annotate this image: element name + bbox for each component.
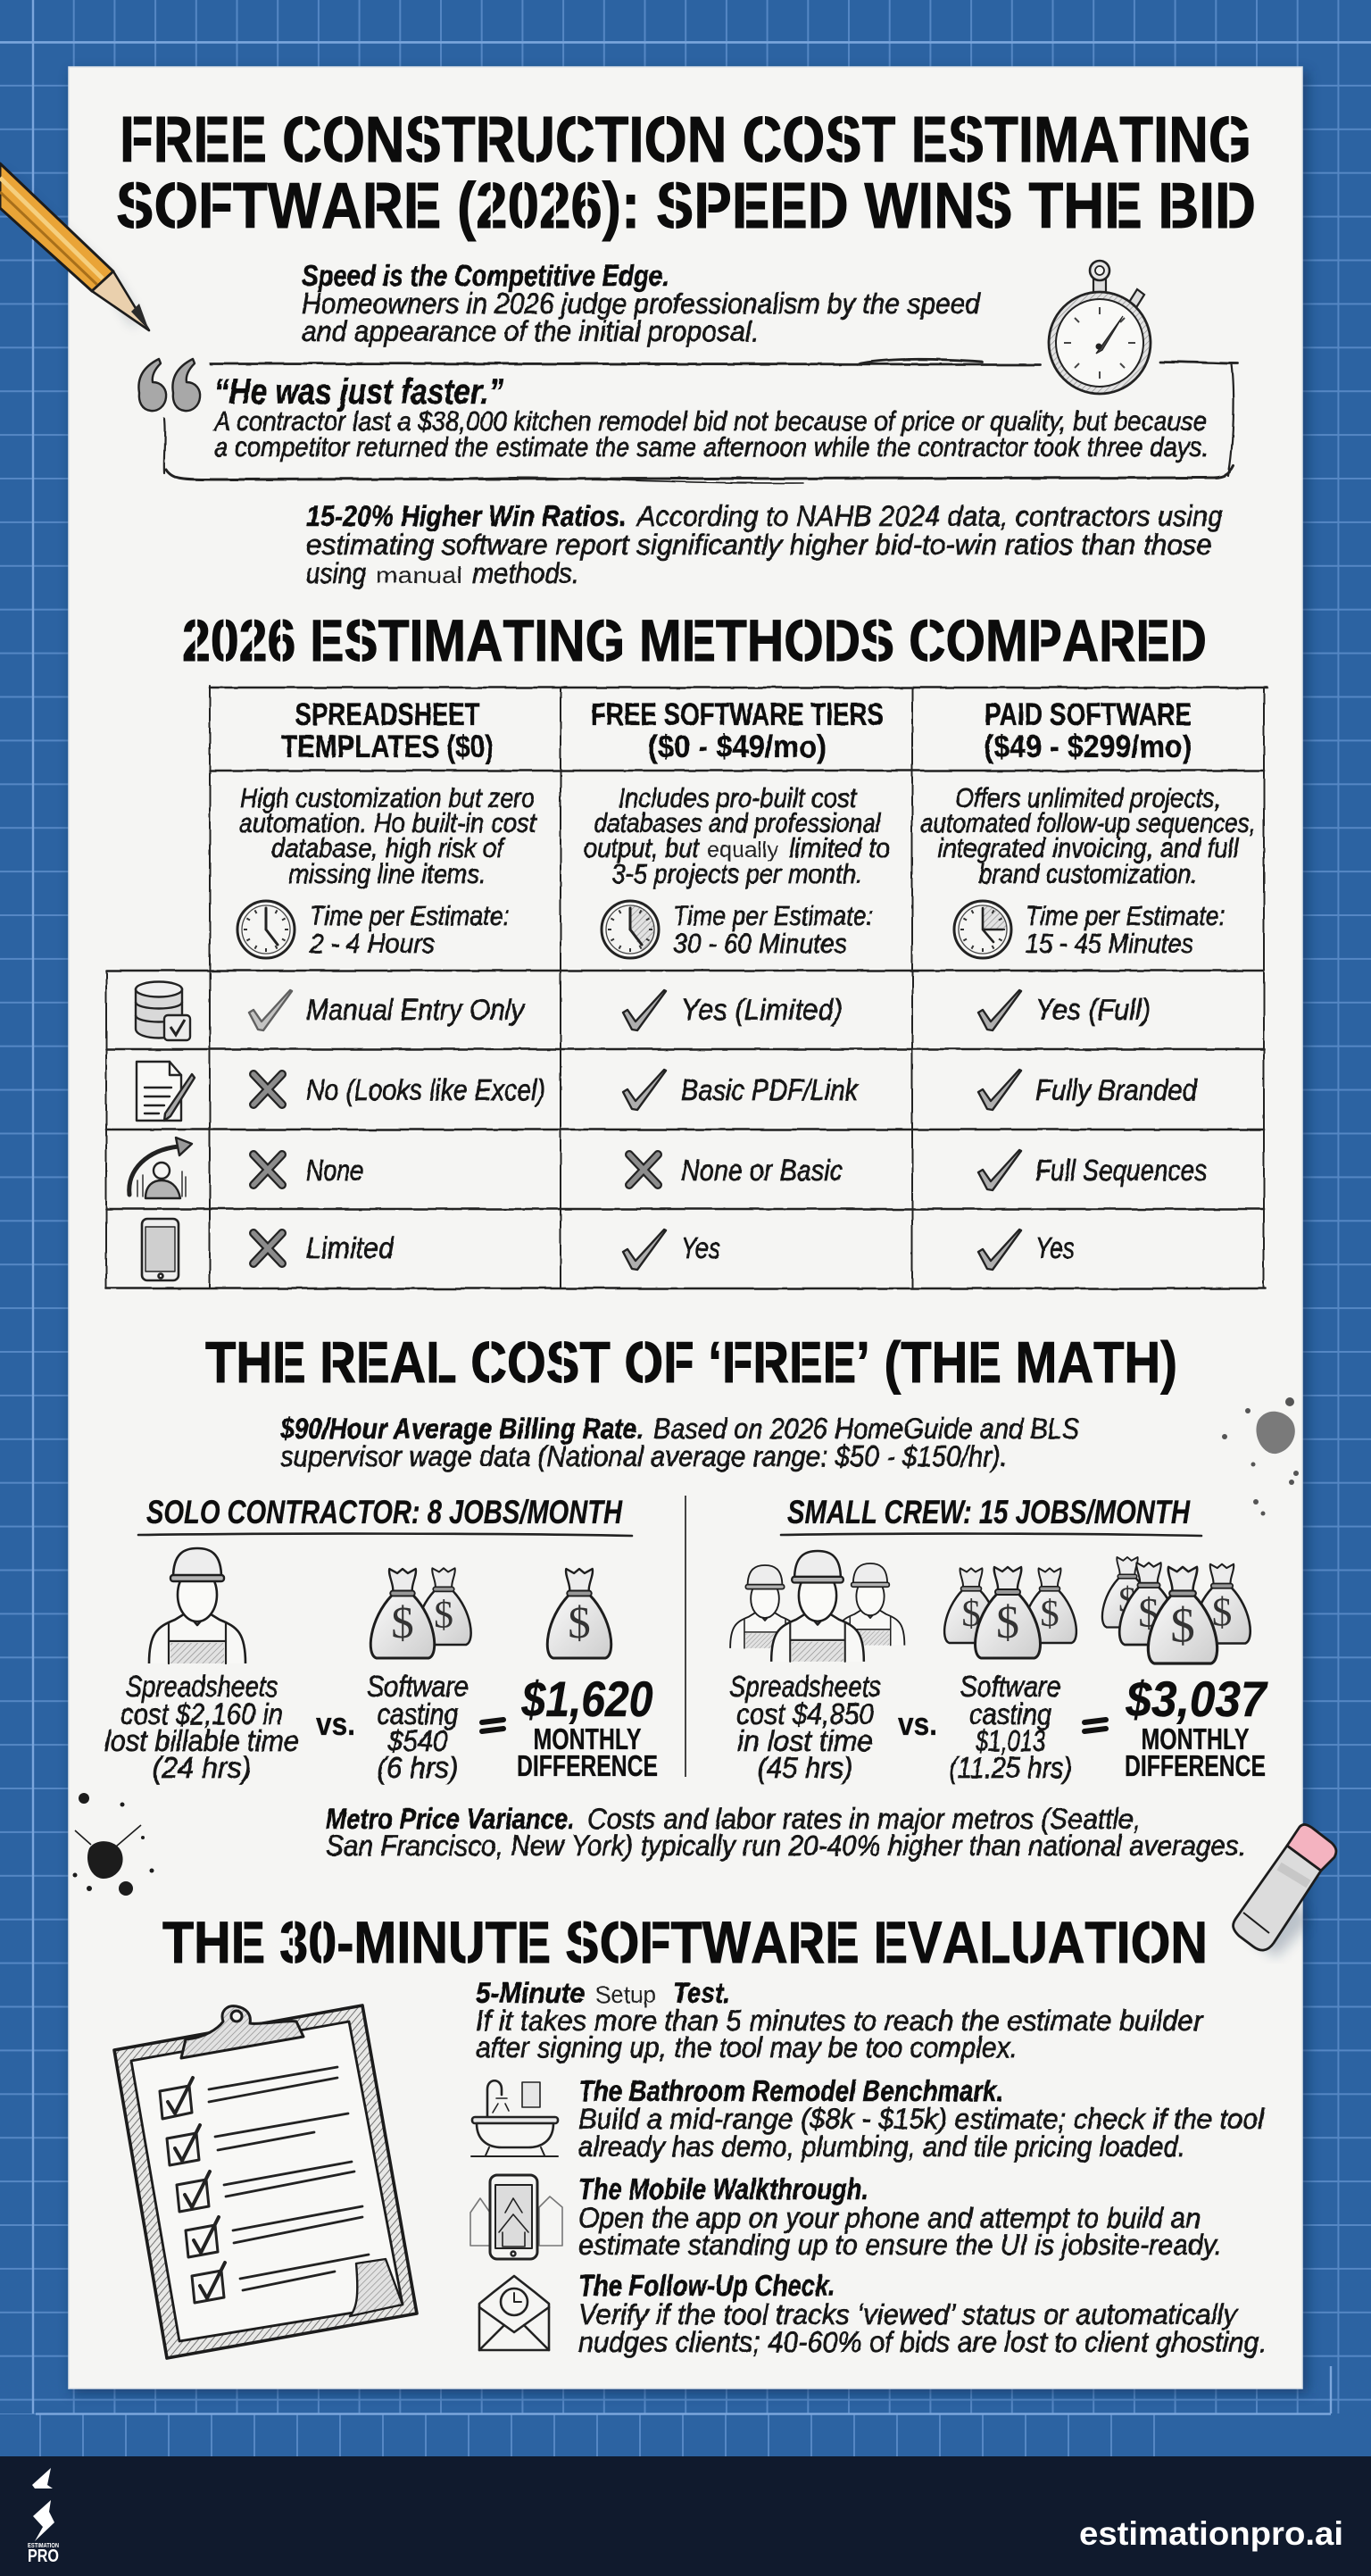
column descriptions: Includes pro-built cost bbox=[618, 782, 858, 813]
crew software cost: (11.25 hrs) bbox=[949, 1751, 1072, 1784]
crew spreadsheet cost bbox=[729, 1670, 881, 1784]
text: mobile walkthrough: The Mobile Walkthrough. bbox=[578, 2172, 868, 2205]
column descriptions: databases and professional bbox=[594, 807, 881, 838]
icon: phone bbox=[142, 1219, 179, 1280]
row labels: None bbox=[306, 1154, 363, 1187]
text: bathroom benchmark bbox=[578, 2074, 1265, 2163]
time per estimate labels: Time per Estimate: bbox=[673, 900, 873, 931]
column headers: ($49 - $299/mo) bbox=[984, 729, 1192, 764]
crew spreadsheet cost: in lost time bbox=[737, 1724, 873, 1757]
text: 5-minute setup test: after signing up, the tool may be too complex. bbox=[476, 2031, 1018, 2063]
crew monthly difference bbox=[1125, 1671, 1268, 1782]
text: bathroom benchmark: Build a mid-range ($8k - $15k) estimate; check if the tool bbox=[578, 2103, 1265, 2135]
text: 5-minute setup test: Test. bbox=[673, 1977, 730, 2009]
row labels: Manual Entry Only bbox=[306, 993, 526, 1026]
time per estimate labels: 15 - 45 Minutes bbox=[1026, 928, 1193, 959]
text: speed is the competitive edge: Speed is the Competitive Edge. bbox=[302, 259, 669, 292]
icon: bathtub bbox=[471, 2080, 558, 2156]
text: mobile walkthrough bbox=[578, 2172, 1222, 2261]
text: win ratios: using bbox=[306, 557, 366, 589]
crew monthly difference: $3,037 bbox=[1126, 1671, 1268, 1727]
heading: 30-minute evaluation: THE 30-MINUTE SOFTWARE EVALUATION bbox=[162, 1909, 1208, 1975]
text: follow-up check: The Follow-Up Check. bbox=[578, 2269, 835, 2302]
icon: crew of three bbox=[730, 1551, 904, 1662]
time per estimate labels: 2 - 4 Hours bbox=[309, 928, 435, 959]
solo monthly difference: MONTHLY bbox=[534, 1722, 641, 1755]
text: win ratios: methods. bbox=[472, 557, 579, 589]
crew spreadsheet cost: (45 hrs) bbox=[757, 1751, 853, 1784]
text: win ratios: 15-20% Higher Win Ratios. bbox=[306, 500, 627, 532]
text: metro price variance bbox=[326, 1803, 1246, 1862]
clipboard paper bbox=[131, 2022, 403, 2341]
solo spreadsheet cost: cost $2,160 in bbox=[120, 1697, 283, 1730]
text: win ratios: manual bbox=[376, 562, 462, 588]
solo software cost: casting bbox=[377, 1697, 459, 1730]
icon: clipboard checklist bbox=[114, 2005, 417, 2358]
crew monthly difference: DIFFERENCE bbox=[1125, 1749, 1266, 1782]
icon: clock 2-4 hours bbox=[237, 901, 295, 958]
solo monthly difference bbox=[517, 1671, 658, 1782]
title: SOFTWARE (2026): SPEED WINS THE BID bbox=[116, 171, 1256, 242]
column descriptions: missing line items. bbox=[289, 858, 486, 889]
text: metro price variance: Costs and labor rates in major metros (Seattle, bbox=[587, 1803, 1141, 1835]
row labels: No (Looks like Excel) bbox=[306, 1073, 545, 1106]
row labels: Yes (Limited) bbox=[681, 993, 843, 1026]
solo spreadsheet cost bbox=[104, 1670, 299, 1784]
heading: the real cost of free: THE REAL COST OF ‘FREE’ (THE MATH) bbox=[205, 1330, 1177, 1395]
pencil bbox=[0, 163, 149, 330]
column headers: TEMPLATES ($0) bbox=[281, 729, 494, 764]
solo monthly difference: DIFFERENCE bbox=[517, 1749, 658, 1782]
time per estimate labels: Time per Estimate: bbox=[310, 900, 510, 931]
icon: four money bags bbox=[1102, 1557, 1251, 1663]
row labels: None or Basic bbox=[681, 1154, 843, 1187]
row labels: Yes (Full) bbox=[1035, 993, 1151, 1026]
crew software cost: Software bbox=[960, 1670, 1060, 1703]
row labels: Full Sequences bbox=[1035, 1154, 1207, 1187]
column descriptions: brand customization. bbox=[978, 858, 1198, 889]
logo: PRO bbox=[28, 2547, 59, 2566]
icon: clock 15-45 minutes bbox=[954, 901, 1011, 958]
solo spreadsheet cost: lost billable time bbox=[104, 1724, 299, 1757]
time per estimate labels: Time per Estimate: bbox=[1026, 900, 1226, 931]
text: bathroom benchmark: already has demo, plumbing, and tile pricing loaded. bbox=[578, 2130, 1185, 2163]
text: speed is the competitive edge: and appearance of the initial proposal. bbox=[302, 315, 759, 347]
text: bathroom benchmark: The Bathroom Remodel Benchmark. bbox=[578, 2074, 1003, 2107]
icon: three money bags bbox=[944, 1567, 1076, 1658]
solo software cost: Software bbox=[367, 1670, 469, 1703]
icon: stopwatch bbox=[1049, 261, 1151, 394]
row labels: Limited bbox=[306, 1231, 395, 1264]
column headers: ($0 - $49/mo) bbox=[648, 729, 827, 764]
icon: document and pen bbox=[137, 1062, 195, 1121]
icon: quotation mark bbox=[138, 359, 200, 411]
panel: solo contractor bbox=[104, 1494, 658, 1784]
icon: follow-up arrow and person bbox=[129, 1138, 192, 1198]
logo bbox=[28, 2468, 59, 2566]
column descriptions bbox=[239, 782, 1256, 889]
crew monthly difference: MONTHLY bbox=[1141, 1722, 1250, 1755]
crew software cost bbox=[949, 1670, 1072, 1784]
clipboard board bbox=[114, 2005, 417, 2358]
panel: small crew bbox=[729, 1494, 1268, 1784]
text: billing rate: $90/Hour Average Billing Rate. bbox=[279, 1413, 644, 1445]
crew spreadsheet cost: Spreadsheets bbox=[729, 1670, 881, 1703]
icon: clock 30-60 minutes bbox=[602, 901, 659, 958]
clipboard clip bbox=[181, 2006, 303, 2058]
column descriptions: equally bbox=[707, 838, 778, 863]
row labels: Yes bbox=[1035, 1231, 1075, 1264]
icon: mobile walkthrough bbox=[470, 2175, 562, 2259]
column descriptions: High customization but zero bbox=[240, 782, 535, 813]
icon: two money bags bbox=[370, 1568, 471, 1658]
crew software cost: casting bbox=[969, 1697, 1052, 1730]
column descriptions: integrated invoicing, and full bbox=[937, 832, 1239, 863]
time per estimate labels bbox=[309, 900, 1226, 959]
subheading: small crew: SMALL CREW: 15 JOBS/MONTH bbox=[787, 1494, 1191, 1530]
logo: ESTIMATION bbox=[28, 2543, 59, 2549]
text: follow-up check bbox=[578, 2269, 1267, 2358]
solo software cost bbox=[367, 1670, 469, 1784]
equals bbox=[1084, 1720, 1106, 1731]
checklist rows bbox=[160, 2067, 369, 2303]
text: mobile walkthrough: estimate standing up to ensure the UI is jobsite-ready. bbox=[578, 2229, 1222, 2261]
icon: worker bbox=[149, 1548, 245, 1663]
icon: database bbox=[136, 982, 190, 1040]
ink splatter: top right bbox=[1222, 1397, 1299, 1516]
column descriptions: automated follow-up sequences, bbox=[920, 807, 1256, 838]
text: speed is the competitive edge: Homeowners in 2026 judge professionalism by the speed bbox=[302, 288, 981, 320]
column descriptions: output, but bbox=[584, 832, 700, 863]
text: speed is the competitive edge bbox=[302, 259, 981, 347]
time per estimate labels: 30 - 60 Minutes bbox=[673, 928, 847, 959]
row marks bbox=[249, 990, 1021, 1270]
crew software cost: $1,013 bbox=[975, 1724, 1045, 1757]
footer bar bbox=[0, 2456, 1371, 2576]
column descriptions: 3-5 projects per month. bbox=[612, 858, 862, 889]
row labels: Fully Branded bbox=[1035, 1073, 1198, 1106]
text: win ratios: estimating software report significantly higher bid-to-win ratios than those bbox=[306, 529, 1212, 561]
icon: envelope with clock bbox=[479, 2276, 549, 2350]
text: metro price variance: San Francisco, New York) typically run 20-40% higher than national averages. bbox=[326, 1830, 1246, 1862]
subheading: solo contractor: SOLO CONTRACTOR: 8 JOBS/MONTH bbox=[146, 1494, 623, 1530]
text: follow-up check: nudges clients; 40-60% of bids are lost to client ghosting. bbox=[578, 2326, 1267, 2358]
text: billing rate: Based on 2026 HomeGuide and BLS bbox=[653, 1413, 1079, 1445]
heading: methods compared: 2026 ESTIMATING METHODS COMPARED bbox=[182, 607, 1207, 673]
text: mobile walkthrough: Open the app on your phone and attempt to build an bbox=[578, 2202, 1201, 2234]
solo spreadsheet cost: Spreadsheets bbox=[125, 1670, 278, 1703]
ink splatter: left bbox=[73, 1793, 154, 1896]
text: billing rate bbox=[279, 1413, 1079, 1472]
row labels: Basic PDF/Link bbox=[681, 1073, 859, 1106]
vs: vs. bbox=[898, 1705, 937, 1742]
row labels bbox=[306, 993, 1207, 1264]
column descriptions: limited to bbox=[789, 832, 890, 863]
row labels: Yes bbox=[681, 1231, 720, 1264]
solo monthly difference: $1,620 bbox=[521, 1671, 653, 1727]
crew spreadsheet cost: cost $4,850 bbox=[736, 1697, 875, 1730]
solo spreadsheet cost: (24 hrs) bbox=[152, 1751, 252, 1784]
text: 5-minute setup test bbox=[476, 1977, 1203, 2063]
title bbox=[116, 104, 1256, 242]
vs: vs. bbox=[316, 1705, 355, 1742]
eraser bbox=[1234, 1824, 1336, 1957]
callout text: “He was just faster.” bbox=[214, 372, 503, 412]
text: 5-minute setup test: If it takes more than 5 minutes to reach the estimate builder bbox=[476, 2005, 1203, 2037]
solo software cost: $540 bbox=[387, 1724, 448, 1757]
text: win ratios bbox=[306, 500, 1223, 589]
footer url: estimationpro.ai bbox=[1079, 2515, 1343, 2552]
divider bbox=[685, 1496, 686, 1777]
text: 5-minute setup test: 5-Minute bbox=[476, 1977, 585, 2009]
table grid bbox=[106, 686, 1267, 1288]
callout frame bbox=[164, 359, 1238, 483]
page curl bbox=[350, 2259, 403, 2316]
column descriptions: Offers unlimited projects, bbox=[955, 782, 1221, 813]
equals bbox=[482, 1720, 503, 1731]
text: follow-up check: Verify if the tool tracks ‘viewed’ status or automatically bbox=[578, 2298, 1239, 2330]
solo software cost: (6 hrs) bbox=[377, 1751, 459, 1784]
callout text: A contractor last a $38,000 kitchen remodel bid not because of price or quality, but because bbox=[212, 405, 1207, 437]
text: billing rate: supervisor wage data (National average range: $50 - $150/hr). bbox=[280, 1440, 1008, 1472]
column headers: PAID SOFTWARE bbox=[985, 697, 1192, 732]
text: 5-minute setup test: Setup bbox=[595, 1981, 656, 2008]
comparison table bbox=[106, 686, 1267, 1288]
column headers: SPREADSHEET bbox=[295, 697, 480, 732]
callout text: a competitor returned the estimate the same afternoon while the contractor took three days. bbox=[214, 431, 1209, 463]
column headers bbox=[281, 697, 1192, 764]
column headers: FREE SOFTWARE TIERS bbox=[591, 697, 884, 732]
column descriptions: database, high risk of bbox=[271, 832, 506, 863]
column descriptions: automation. Ho built-in cost bbox=[239, 807, 537, 838]
text: win ratios: According to NAHB 2024 data, contractors using bbox=[636, 500, 1223, 532]
callout text bbox=[212, 372, 1209, 463]
icon: one money bag bbox=[547, 1569, 611, 1658]
text: metro price variance: Metro Price Variance. bbox=[326, 1803, 575, 1835]
